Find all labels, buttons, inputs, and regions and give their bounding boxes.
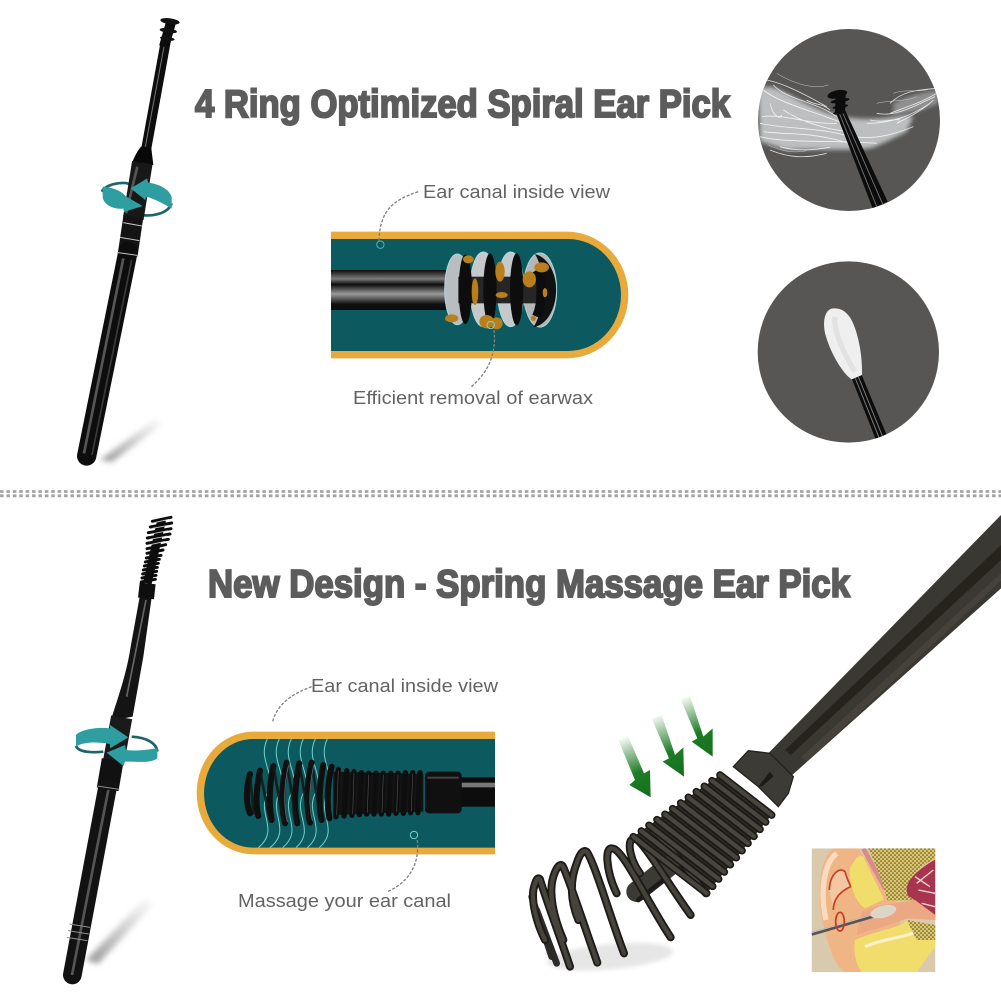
callout marker: canal — [379, 192, 418, 241]
shadow of ear pick 1 — [100, 419, 163, 462]
label: ear canal inside view: Ear canal inside view — [311, 675, 499, 696]
ear pick 1 with rotation arrows — [84, 17, 180, 456]
ear canal tube — [331, 232, 628, 358]
hex collar — [733, 751, 793, 807]
spring coils — [532, 775, 772, 967]
circle: pick with cotton fibres — [758, 29, 940, 211]
bottom section: spring massage ear pick — [67, 515, 1001, 975]
top section: 4 ring spiral ear pick — [84, 17, 940, 462]
title: 4 ring optimized spiral ear pick: 4 Ring Optimized Spiral Ear Pick — [195, 83, 730, 126]
massage wave lines — [258, 739, 330, 848]
canal diagram 2 — [197, 687, 495, 892]
circle: cotton swab — [758, 261, 939, 443]
label: efficient removal of earwax: Efficient removal of earwax — [353, 387, 594, 408]
shadow of ear pick 2 — [86, 898, 154, 964]
callout marker: canal — [273, 687, 312, 722]
large spring tip close-up — [532, 515, 1001, 975]
callout marker: earwax — [471, 330, 494, 387]
spiral pick head in canal — [331, 252, 557, 329]
callout marker: massage — [387, 840, 418, 892]
canal diagram 1 — [331, 192, 628, 387]
label: massage your ear canal: Massage your ear canal — [238, 890, 451, 911]
spring pick in canal — [247, 763, 495, 823]
title: new design spring massage ear pick: New Design - Spring Massage Ear Pick — [208, 563, 850, 606]
label: ear canal inside view: Ear canal inside view — [423, 181, 611, 202]
ear pick 2 with rotation arrows — [67, 517, 172, 975]
ear canal tube — [197, 732, 495, 854]
shaft — [765, 515, 1001, 780]
ear anatomy inset — [812, 848, 935, 972]
green pressure arrows — [618, 696, 713, 797]
divider: dotted line — [0, 492, 1001, 496]
